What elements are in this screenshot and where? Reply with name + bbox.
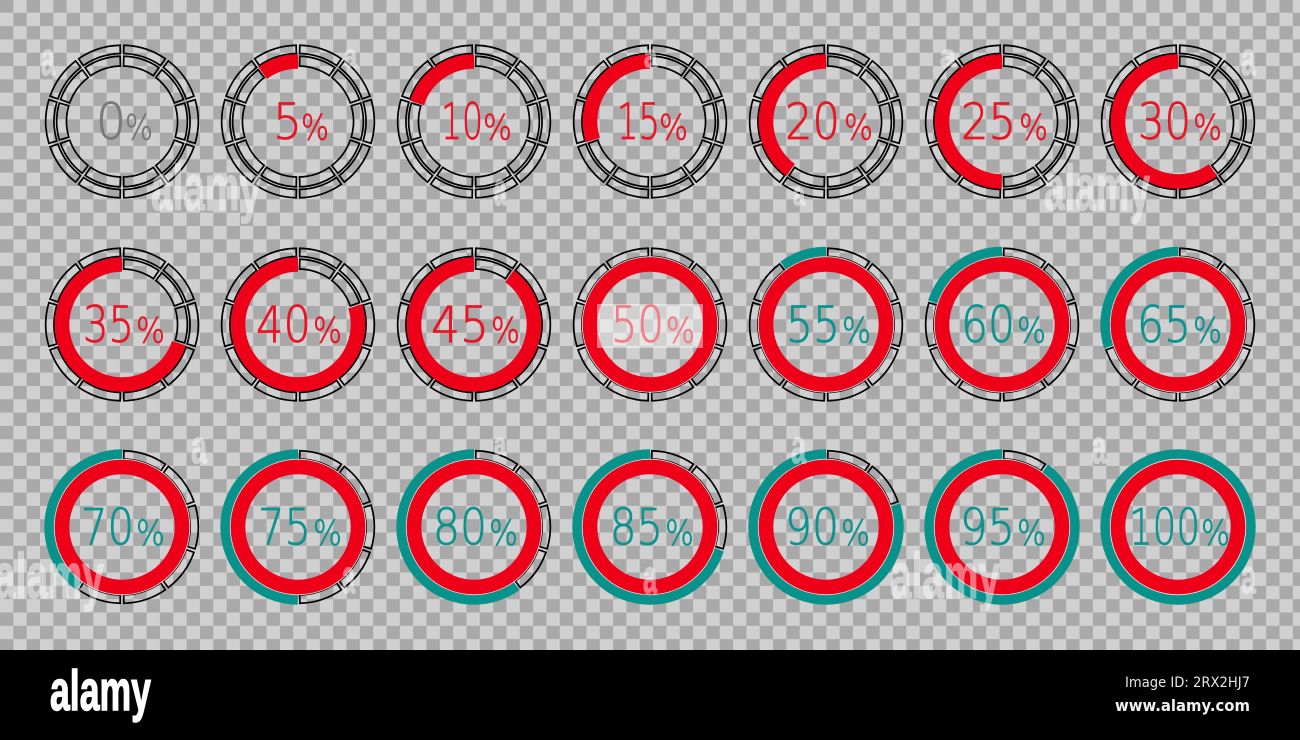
ring: 20% [740, 34, 912, 209]
ring: 60% [916, 237, 1088, 412]
ring: 75%: % [313, 514, 342, 554]
ring: 75% [212, 440, 384, 614]
ring: 25% [916, 34, 1088, 209]
ring: 95%: 95 [960, 498, 1015, 556]
ring: 30% [1092, 34, 1264, 209]
ring: 30%: % [1193, 108, 1222, 148]
ring: 20%: % [844, 108, 873, 148]
ring: 70%: % [136, 514, 165, 554]
ring: 85% [564, 440, 736, 614]
stock watermarks: a [342, 550, 355, 603]
ring: 45% [388, 237, 560, 412]
ring: 5%: 5 [273, 93, 302, 151]
ring: 90% [740, 440, 912, 614]
ring: 35%: % [136, 312, 165, 352]
footer logo: alamy [50, 659, 151, 723]
stock watermarks [0, 32, 1256, 612]
ring: 20%: 20 [785, 93, 840, 151]
ring: 50%: % [666, 312, 695, 352]
ring: 100%: 100 [1129, 498, 1200, 556]
ring: 5%: % [301, 108, 329, 148]
ring: 60%: % [1017, 312, 1046, 352]
ring: 35% [36, 237, 208, 412]
stock watermarks: alamy [1044, 152, 1150, 224]
ring: 85%: 85 [610, 498, 663, 556]
stock watermarks: a [793, 176, 805, 212]
footer image id: Image ID: 2RX2HJ7 [1125, 675, 1250, 691]
ring: 90%: 90 [785, 498, 839, 556]
ring: 5% [212, 34, 384, 209]
ring: 95%: % [1017, 514, 1046, 554]
ring: 95% [916, 440, 1088, 614]
stock watermarks: a [1241, 550, 1256, 603]
ring: 35%: 35 [83, 296, 134, 354]
stock watermarks: a [791, 420, 806, 473]
ring: 85%: % [665, 514, 694, 554]
ring: 25%: 25 [961, 93, 1016, 151]
stock watermarks: a [191, 420, 208, 473]
ring: 0%: % [125, 108, 153, 148]
ring: 40%: 40 [256, 296, 311, 354]
stock watermarks: alamy [890, 540, 1000, 612]
ring: 15%: % [659, 108, 688, 148]
ring: 25%: % [1019, 108, 1048, 148]
ring: 100%: % [1201, 514, 1230, 554]
ring: 45%: 45 [431, 296, 489, 354]
ring: 55% [740, 237, 912, 412]
stock watermarks: a [643, 550, 657, 603]
ring: 30%: 30 [1138, 93, 1191, 151]
ring: 10%: % [483, 108, 512, 148]
ring: 60%: 60 [961, 296, 1015, 354]
stock watermarks: a [494, 162, 506, 215]
stock watermarks: a [41, 32, 55, 85]
ring: 70%: 70 [81, 498, 134, 556]
ring: 40% [212, 237, 384, 412]
ring: 0%: 0 [96, 93, 126, 151]
ring: 70% [36, 440, 208, 614]
stock watermarks: a [940, 38, 956, 74]
ring: 65% [1092, 237, 1264, 412]
ring: 90%: % [841, 514, 870, 554]
ring: 80%: % [489, 514, 518, 554]
ring: 100% [1105, 454, 1251, 600]
ring: 0% [36, 34, 208, 209]
ring: 10%: 10 [441, 93, 483, 151]
ring: 50% [564, 237, 736, 412]
ring: 40%: % [313, 312, 342, 352]
ring: 45%: % [491, 312, 520, 352]
ring: 55%: 55 [786, 296, 840, 354]
ring: 15% [564, 34, 736, 209]
ring: 65%: % [1193, 312, 1222, 352]
stock watermarks: a [1092, 420, 1106, 473]
ring: 80%: 80 [433, 498, 487, 556]
ring: 55%: % [842, 312, 871, 352]
ring: 75%: 75 [258, 498, 311, 556]
stock watermarks: a [1241, 32, 1256, 85]
ring: 15%: 15 [617, 93, 660, 151]
stock watermarks: a [494, 426, 506, 462]
ring: 10% [388, 34, 560, 209]
stock watermarks: a [344, 38, 357, 74]
ring: 65%: 65 [1137, 296, 1191, 354]
footer website: www.alamy.com [1115, 696, 1250, 715]
ring: 80% [388, 440, 560, 614]
stock watermarks: alamy [151, 152, 261, 224]
ring: 50%: 50 [611, 296, 664, 354]
stock watermarks: a [644, 38, 657, 74]
